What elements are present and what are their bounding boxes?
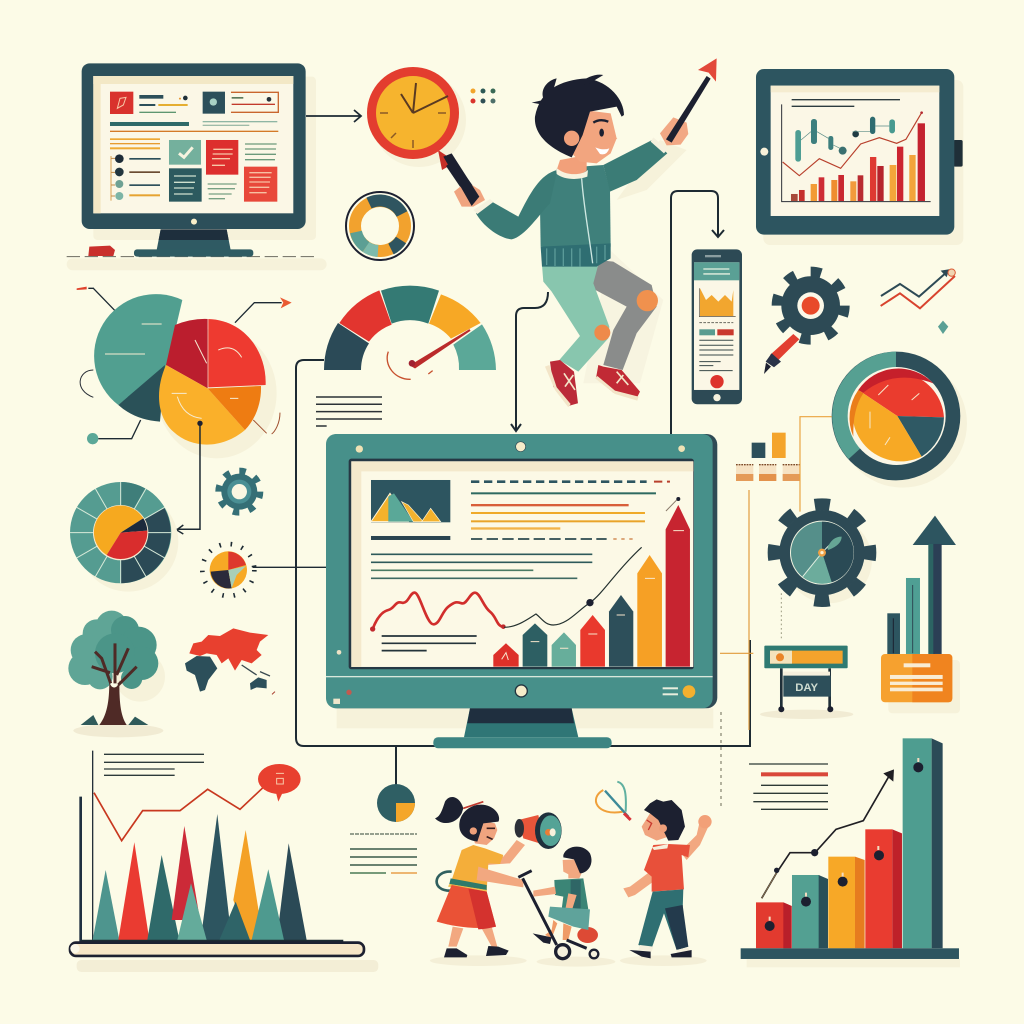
tablet with candlestick and bar chart (756, 69, 963, 245)
photo tile (371, 480, 450, 522)
speech bubble (258, 764, 301, 802)
gauge chart (316, 286, 496, 426)
front leg mint (542, 263, 609, 372)
lower hand (454, 182, 485, 207)
desk signboard: DAY (795, 682, 819, 694)
phone with report screen (692, 249, 742, 404)
pie donut chart: right (832, 352, 967, 488)
right shoe (596, 365, 640, 398)
icon: world map (185, 628, 275, 694)
main monitor with dashboard (326, 434, 717, 748)
large gear with pie (774, 504, 872, 603)
pointer stick (666, 58, 717, 143)
icon: six small dots (470, 88, 496, 104)
arrow: monitor to clock (306, 110, 361, 122)
donut ring chart (346, 192, 414, 260)
radial wheel chart (70, 482, 178, 592)
trend line (504, 547, 642, 627)
megaphone (515, 812, 562, 849)
icon: tree (68, 611, 165, 737)
icon: zigzag trend arrows (881, 269, 955, 334)
icon: gear with tool handle (764, 272, 844, 374)
stepped 3D bar chart (741, 738, 960, 967)
desk signboard (760, 593, 853, 719)
arrow bars (493, 505, 690, 667)
pie chart cluster (77, 287, 292, 534)
handle in lower hand (443, 153, 479, 206)
rising arrow with bars on orange card (881, 516, 960, 713)
connector: gauge to main monitor frame (296, 360, 750, 746)
sunburst mini pie (202, 544, 327, 596)
back leg grey (588, 260, 657, 370)
connector: sunburst dotted and stem (720, 712, 722, 810)
girl with megaphone (430, 797, 562, 966)
icon: small gear (219, 471, 260, 512)
small child on tricycle (518, 847, 615, 967)
area triangles chart with line (70, 751, 378, 972)
icon: magnifying clock (367, 67, 476, 197)
sweater (540, 165, 611, 247)
boy jumping with pointer (443, 58, 717, 407)
small tiles with bars and orange connectors (720, 417, 832, 730)
text lines block: mini pie (350, 834, 417, 873)
head (532, 75, 624, 179)
monitor: top left dashboard (67, 63, 327, 270)
left shoe (550, 360, 578, 406)
icon: orange and teal bow (596, 782, 631, 820)
arrow: monitor up and over to phone (671, 191, 724, 434)
raised hand (660, 117, 688, 145)
arrow: boy to main monitor (511, 292, 548, 431)
connector and mini pie under main monitor (377, 746, 415, 822)
boy in red shirt waving (620, 799, 712, 966)
red wave line (373, 593, 503, 629)
